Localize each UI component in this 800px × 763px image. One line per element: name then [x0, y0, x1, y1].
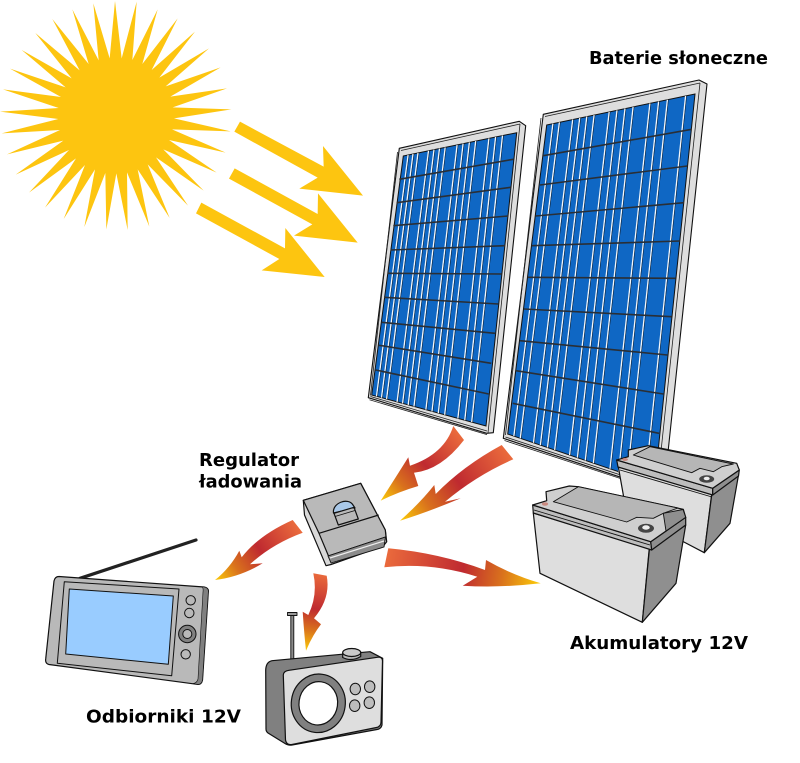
- arrow: controller to television: [215, 520, 303, 580]
- arrow: ray 2: [229, 168, 358, 243]
- radio buttons: [350, 681, 375, 712]
- television screen: [66, 589, 173, 664]
- icon: rear battery: [617, 446, 739, 553]
- television antenna: [80, 540, 196, 578]
- radio antenna: [288, 612, 297, 665]
- icon: radio: [266, 612, 383, 745]
- arrow: ray 3: [196, 203, 325, 277]
- television buttons: [179, 596, 196, 659]
- radio speaker: [287, 671, 349, 736]
- heading: 12V loads: Odbiorniki 12V: [86, 706, 241, 728]
- arrow: controller to batteries: [384, 548, 541, 586]
- icon: charge controller: [303, 483, 387, 566]
- panel: right solar panel: [503, 80, 707, 490]
- arrow: right panel to controller: [400, 445, 513, 521]
- heading: charge controller: [198, 450, 302, 492]
- icon: front battery: [533, 486, 686, 622]
- arrow: ray 1: [234, 122, 363, 196]
- radio front face: [283, 657, 382, 745]
- arrow: controller to radio: [303, 573, 328, 651]
- arrow: left panel to controller: [381, 426, 464, 501]
- heading: batteries: Akumulatory 12V: [570, 633, 748, 654]
- heading: solar panels: Baterie słoneczne: [589, 48, 768, 69]
- radio knob: [343, 648, 361, 660]
- sun rays arrows: [196, 122, 363, 277]
- icon: sun: [0, 1, 231, 230]
- heading: charge controller: ładowania: [198, 472, 302, 492]
- icon: television: [46, 540, 208, 684]
- panel: left solar panel: [368, 121, 526, 435]
- heading: charge controller: Regulator: [199, 450, 299, 471]
